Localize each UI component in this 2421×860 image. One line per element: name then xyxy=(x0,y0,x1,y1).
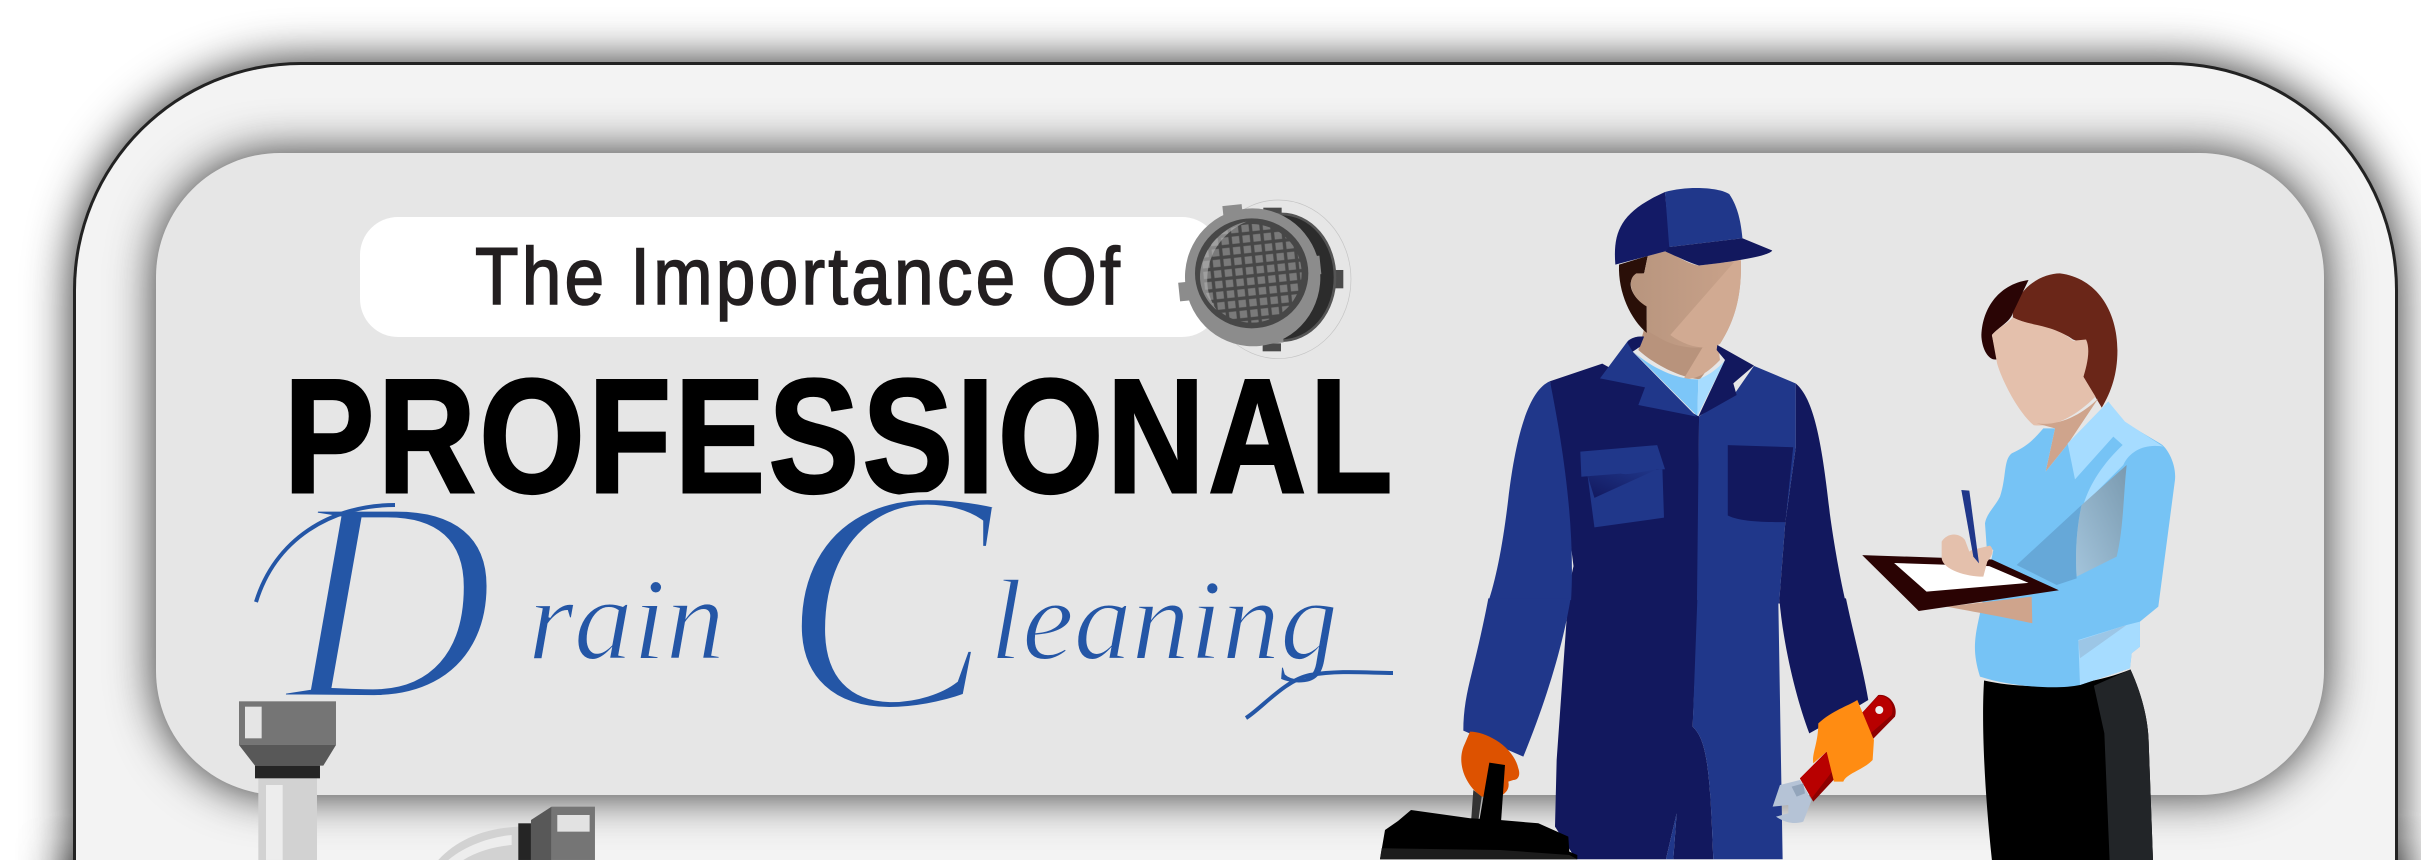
heading: Drain Cleaning script: leaning xyxy=(990,557,1338,685)
plumber: right glove xyxy=(1813,700,1874,782)
clipboard xyxy=(1862,555,2059,611)
icon: drain cover xyxy=(1171,197,1351,359)
toolbox xyxy=(1380,763,1577,859)
woman: trousers xyxy=(1983,670,2153,860)
plumber: left glove xyxy=(1461,732,1519,797)
pen xyxy=(1961,490,1979,563)
plumber: legs light xyxy=(1693,600,1783,859)
title pill xyxy=(360,217,1220,337)
plumber: right sleeve upper xyxy=(1779,383,1846,603)
woman: collar and shoulder xyxy=(2068,402,2163,505)
woman: blouse xyxy=(1975,402,2175,687)
panel: header background xyxy=(156,153,2324,795)
illustration: plumber xyxy=(1380,188,1896,859)
woman: neck xyxy=(2037,398,2098,472)
heading: Drain Cleaning script: D xyxy=(280,440,494,761)
woman: blouse hem xyxy=(2078,622,2140,685)
plumber: cap xyxy=(1615,192,1670,265)
icon: vertical pipe xyxy=(239,701,336,860)
woman: forearm xyxy=(1947,597,2032,623)
heading: Drain Cleaning script: C xyxy=(780,424,1000,778)
plumber: left sleeve lower xyxy=(1463,598,1571,757)
wrench xyxy=(1773,695,1896,823)
plumber: hair xyxy=(1619,256,1648,333)
plumber: shirt xyxy=(1633,352,1698,416)
woman: front hair xyxy=(1981,280,2029,360)
woman: back hair xyxy=(2013,273,2117,408)
woman: face xyxy=(1992,317,2095,426)
plumber: face xyxy=(1631,251,1741,348)
plumber: upper torso xyxy=(1550,364,1699,603)
plumber: neck xyxy=(1638,320,1717,379)
plumber: left sleeve upper xyxy=(1488,381,1572,603)
swash: tail flourish xyxy=(1246,672,1393,718)
plumber: right sleeve lower xyxy=(1779,598,1868,733)
heading: Drain Cleaning script: rain xyxy=(528,554,725,685)
icon: elbow pipe xyxy=(438,807,595,860)
swash: opening flourish xyxy=(256,505,395,602)
plumber: collar xyxy=(1600,337,1697,417)
woman: blouse shading xyxy=(2017,505,2082,585)
plumber: legs dark xyxy=(1555,600,1713,859)
heading: PROFESSIONAL: PROFESSIONAL xyxy=(284,345,1396,527)
illustration: woman with clipboard xyxy=(1862,273,2175,860)
heading: Drain Cleaning script xyxy=(256,424,1393,778)
plumber: pockets xyxy=(1588,469,1664,527)
heading: The Importance Of: The Importance Of xyxy=(475,232,1123,322)
woman: hand xyxy=(1942,535,1992,577)
